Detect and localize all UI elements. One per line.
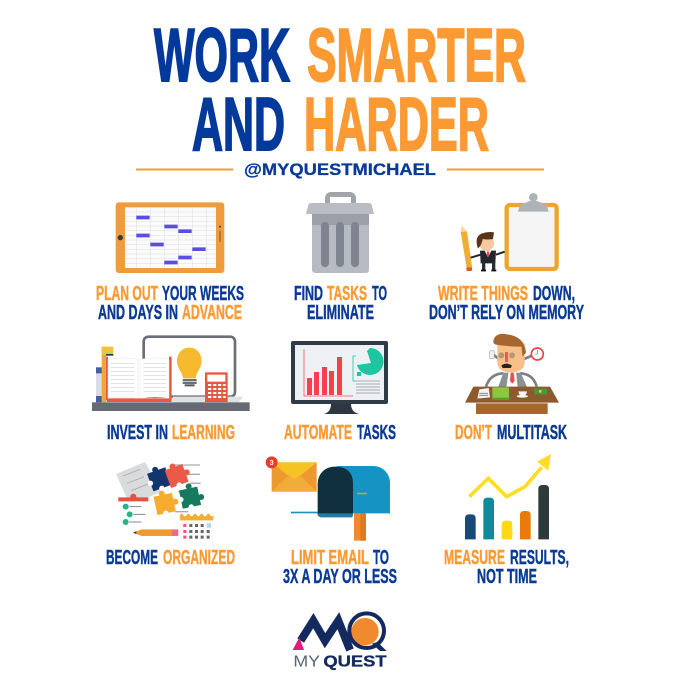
label: invest in learning: INVEST IN [107,422,168,444]
label: find tasks: TO [372,283,387,305]
logo: MyQuest [293,613,387,671]
label: find tasks: FIND [294,283,323,305]
label: plan out [96,283,244,324]
icon: monitor with charts [291,341,388,414]
label: measure results: RESULTS, [510,547,569,569]
icon: envelope and mailbox [266,456,390,541]
label: plan out: PLAN OUT [96,283,158,305]
icon: puzzle pieces, clipboard, calendar, pencil [116,459,213,544]
label: become organized: BECOME [106,547,158,569]
handle with rules: @MYQUESTMICHAEL [244,160,436,179]
icon: tablet calendar [116,202,224,273]
label: write things: DON’T RELY ON MEMORY [429,302,584,324]
label: automate tasks: TASKS [357,422,396,444]
icon: books, laptop, bulb, calculator [92,337,250,411]
icon: multitasking man at desk [465,334,559,414]
label: plan out: ADVANCE [182,302,242,324]
label: write things: WRITE THINGS [438,283,528,305]
logo: MyQuest: MY [293,654,320,671]
label: limit email: LIMIT EMAIL [291,547,369,569]
label: invest in learning: LEARNING [172,422,235,444]
title: WORK [154,13,290,97]
label: don't multitask: DON’T [455,422,492,444]
icon: envelope and mailbox: 3 [270,458,274,467]
icon: trash can [306,192,374,273]
label: automate tasks: AUTOMATE [284,422,352,444]
label: become organized [106,547,235,569]
title: SMARTER [307,13,526,97]
icon: clipboard with man and pencil [461,193,557,271]
label: plan out: YOUR WEEKS [162,283,244,305]
logo: MyQuest: QUEST [323,654,387,671]
title: HARDER [304,82,489,166]
label: find tasks: TASKS [327,283,367,305]
label: measure results: NOT TIME [477,566,537,588]
label: find tasks [294,283,387,324]
label: measure results [444,547,569,588]
label: limit email: TO [373,547,389,569]
label: become organized: ORGANIZED [163,547,235,569]
label: plan out: AND DAYS IN [98,302,178,324]
label: limit email: 3X A DAY OR LESS [283,566,397,588]
label: don't multitask [455,422,567,444]
label: measure results: MEASURE [444,547,505,569]
label: write things: DOWN, [533,283,575,305]
label: limit email [283,547,397,588]
title: AND [192,82,285,166]
label: write things [429,283,584,324]
icon: bar chart with rising arrow [465,454,551,539]
label: find tasks: ELIMINATE [307,302,374,324]
title [154,13,526,166]
label: don't multitask: MULTITASK [497,422,567,444]
